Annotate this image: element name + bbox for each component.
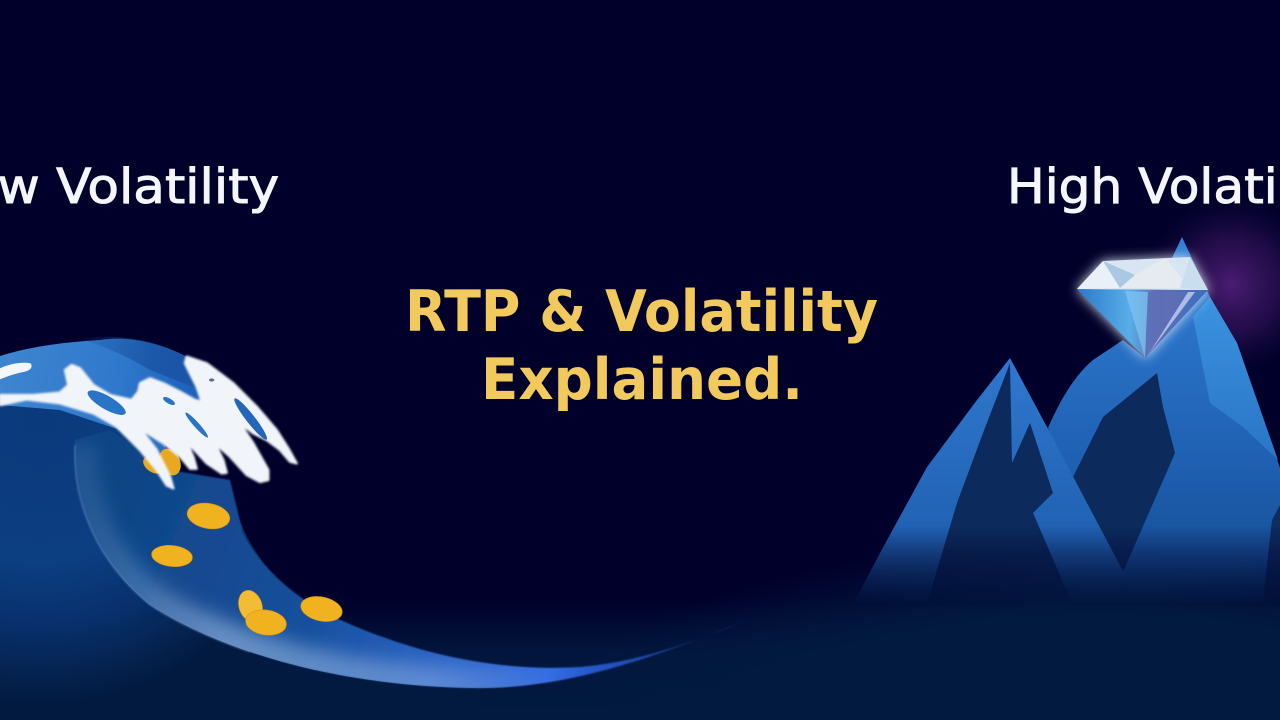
left mountain [858,358,1123,596]
diamond pavilion [1077,289,1208,358]
coins [151,500,345,638]
swoosh highlight [75,445,585,688]
white foam [0,357,297,488]
diamond [1077,257,1208,358]
title line 1: RTP & Volatility [405,279,878,345]
diamond crown [1077,257,1208,290]
title [405,279,878,413]
illustration: low volatility wave with coins [0,337,752,720]
swoosh band [75,430,752,688]
swoosh rim line [75,445,250,652]
foam splash [0,363,32,379]
notch water [148,440,166,455]
purple glow [1166,211,1280,358]
coin 3 [238,590,263,619]
illustration: high volatility mountains with diamond [850,195,1280,610]
left mountain shadow facet [931,363,1066,591]
right mountain [1048,237,1280,610]
wave crest [0,338,201,440]
right mountain shadow facet [1073,373,1175,572]
coin 5 [300,596,342,622]
wave body [0,405,266,691]
coin behind foam [143,448,181,476]
coin 4 [245,610,287,636]
title line 2: Explained. [481,347,803,413]
right mountain highlight [1193,297,1278,460]
coin 1 [186,502,230,530]
crest top shade [80,337,196,388]
diamond glow [1077,257,1208,358]
coin 2 [151,545,193,567]
